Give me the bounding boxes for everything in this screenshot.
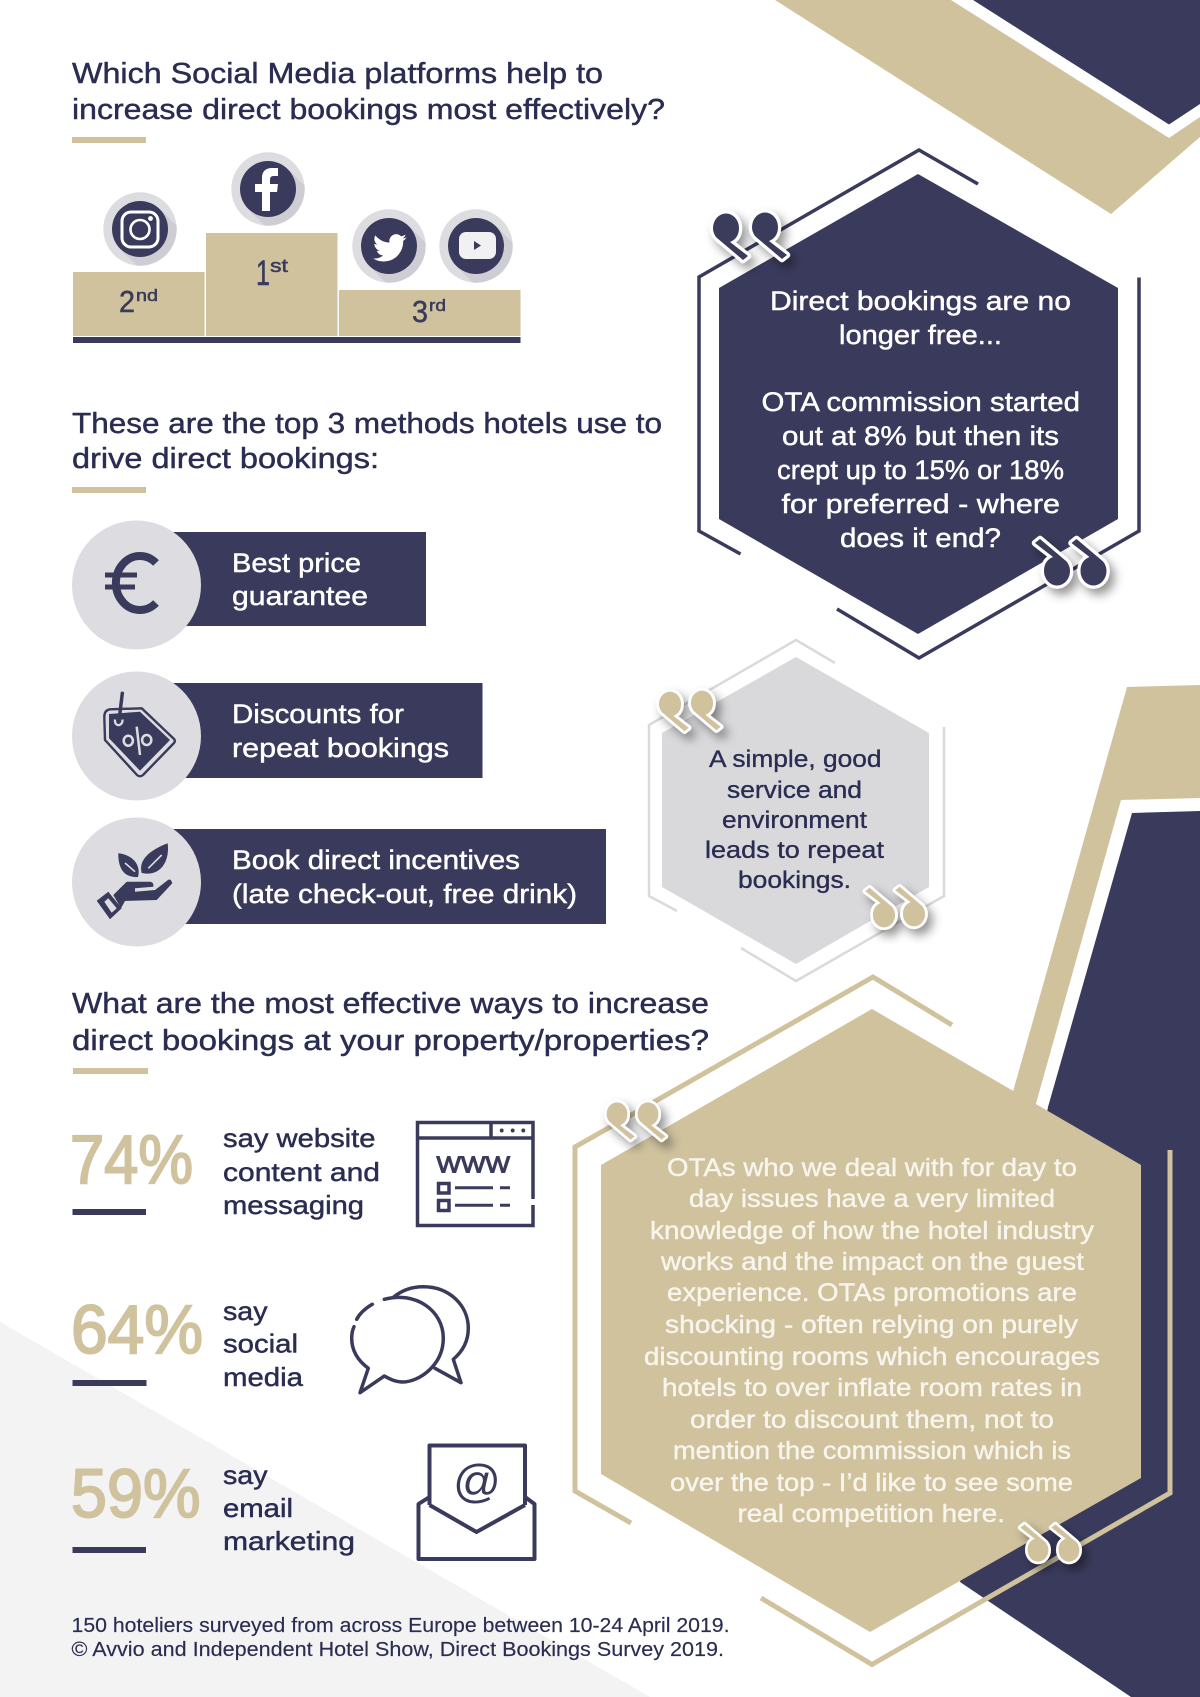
quote text: crept up to 15% or 18%: [777, 455, 1064, 485]
quote panel: direct bookings are no longer free: [699, 150, 1139, 658]
icon: instagram: [103, 192, 177, 266]
heading: top 3 methods: These are the top 3 methods hotels use to: [72, 408, 662, 440]
stat: 64% social media: say: [223, 1296, 268, 1326]
heading: top 3 methods: drive direct bookings:: [72, 443, 379, 475]
podium: third place: [339, 290, 520, 336]
podium: first place: [206, 233, 338, 336]
quote panel: OTAs: [575, 977, 1170, 1664]
method: discounts for repeat bookings: Discounts for: [232, 699, 404, 729]
podium: first place: 1: [256, 254, 270, 293]
quote text: for preferred - where: [782, 489, 1060, 519]
icon: euro: [72, 520, 201, 650]
quote text: [762, 286, 1080, 553]
method: best price guarantee: guarantee: [232, 581, 368, 611]
quote text: mention the commission which is: [673, 1437, 1071, 1465]
footer note: 150 hoteliers surveyed from across Europe between 10-24 April 2019.: [72, 1615, 730, 1637]
method: discounts for repeat bookings: [72, 672, 482, 800]
stat: 64% social media: [71, 1287, 468, 1393]
icon: opening quote mark: [713, 212, 787, 260]
heading: social media: [72, 58, 665, 143]
icon: price tag: [72, 672, 201, 800]
podium: second place: 2: [119, 284, 135, 319]
icon: speech bubbles: [352, 1287, 468, 1393]
quote text: OTAs who we deal with for day to: [667, 1154, 1077, 1182]
stat: 64% social media: 64%: [71, 1291, 203, 1368]
icon: website window: WWW: [436, 1151, 510, 1177]
quote text: shocking - often relying on purely: [665, 1311, 1079, 1339]
quote text: real competition here.: [738, 1500, 1005, 1528]
icon: opening quote mark: [607, 1102, 666, 1140]
quote text: [644, 1154, 1100, 1528]
right side decoration: [960, 685, 1200, 1697]
podium chart: [73, 233, 520, 343]
heading: social media: Which Social Media platforms help to: [72, 58, 603, 90]
footer note: [72, 1615, 730, 1661]
icon: hand with leaves: [72, 818, 201, 946]
quote text: over the top - I’d like to see some: [670, 1469, 1073, 1497]
quote text: longer free...: [839, 320, 1002, 350]
method: best price guarantee: [72, 520, 426, 650]
quote text: out at 8% but then its: [782, 421, 1059, 451]
quote text: order to discount them, not to: [690, 1406, 1054, 1434]
method: discounts for repeat bookings: repeat bookings: [232, 733, 449, 763]
podium: second place: [73, 272, 204, 336]
quote text: Direct bookings are no: [770, 286, 1071, 316]
stat: 74% website content: say website: [223, 1123, 376, 1153]
stat: 59% email marketing: marketing: [223, 1526, 355, 1556]
quote text: knowledge of how the hotel industry: [650, 1217, 1095, 1245]
quote text: does it end?: [840, 523, 1001, 553]
quote text: environment: [722, 807, 867, 834]
quote text: discounting rooms which encourages: [644, 1343, 1100, 1371]
background triangle: [0, 1322, 650, 1697]
quote panel: simple good service: [649, 640, 944, 981]
quote text: experience. OTAs promotions are: [667, 1279, 1077, 1307]
icon: email envelope: [418, 1446, 534, 1559]
stat: 74% website content: [70, 1121, 533, 1226]
quote text: A simple, good: [709, 746, 882, 773]
method: book direct incentives: Book direct incentives: [232, 845, 520, 875]
stat: 59% email marketing: [71, 1446, 534, 1559]
quote text: leads to repeat: [705, 837, 884, 864]
heading: most effective ways: [72, 988, 709, 1074]
podium: first place: st: [270, 256, 288, 276]
heading: top 3 methods: [72, 408, 662, 493]
stat: 59% email marketing: email: [223, 1493, 293, 1523]
stat: 64% social media: social: [223, 1328, 298, 1358]
method: book direct incentives: (late check-out, free drink): [232, 879, 577, 909]
stat: 74% website content: content and: [223, 1157, 380, 1187]
icon: twitter: [352, 209, 426, 283]
quote text: OTA commission started: [762, 387, 1080, 417]
icon: facebook: [231, 152, 305, 226]
icon: email envelope: @: [453, 1455, 501, 1507]
icon: closing quote mark: [1035, 539, 1106, 586]
icon: closing quote mark: [865, 887, 925, 927]
method: book direct incentives: [72, 818, 606, 946]
icon: youtube: [439, 209, 513, 283]
podium: third place: rd: [429, 296, 446, 315]
stat: 74% website content: messaging: [223, 1190, 364, 1220]
quote text: [705, 746, 884, 894]
icon: closing quote mark: [1020, 1524, 1079, 1562]
top right decoration: [775, 0, 1200, 214]
podium: third place: 3: [412, 294, 428, 329]
method: best price guarantee: Best price: [232, 548, 361, 578]
footer note: © Avvio and Independent Hotel Show, Direct Bookings Survey 2019.: [72, 1639, 724, 1661]
quote text: service and: [727, 777, 862, 804]
heading: most effective ways: direct bookings at your property/properties?: [72, 1025, 709, 1057]
quote text: day issues have a very limited: [689, 1185, 1055, 1213]
stat: 59% email marketing: say: [223, 1460, 268, 1490]
stat: 64% social media: media: [223, 1362, 304, 1392]
podium: second place: nd: [136, 286, 158, 305]
heading: most effective ways: What are the most effective ways to increase: [72, 988, 709, 1020]
icon: website window: [418, 1122, 533, 1226]
quote text: hotels to over inflate room rates in: [662, 1374, 1082, 1402]
quote text: works and the impact on the guest: [660, 1248, 1084, 1276]
heading: social media: increase direct bookings most effectively?: [72, 94, 665, 126]
icon: opening quote mark: [659, 691, 721, 731]
stat: 74% website content: 74%: [70, 1121, 193, 1198]
quote text: bookings.: [738, 867, 851, 894]
stat: 59% email marketing: 59%: [71, 1455, 200, 1532]
